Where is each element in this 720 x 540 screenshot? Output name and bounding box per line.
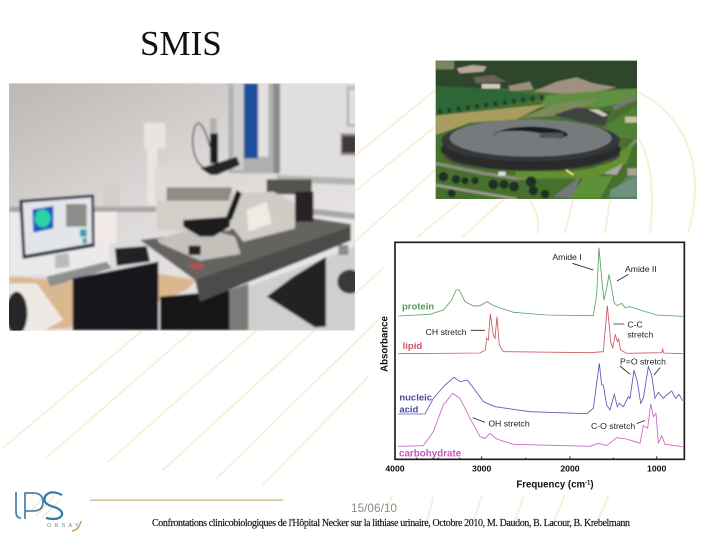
x axis labels: 2000 [560, 464, 580, 474]
nucleic acid spectrum: acid [399, 404, 419, 415]
photo: infrared microscope laboratory [6, 80, 363, 337]
lipid spectrum [398, 306, 683, 354]
x axis labels: 3000 [472, 464, 491, 474]
background: pale concentric yellow arcs [3, 90, 695, 523]
logo: LPS Orsay: ORSAY [47, 523, 82, 529]
x axis labels: Frequency (cm [516, 479, 585, 490]
peak annotations: stretch [627, 330, 653, 340]
table slab [140, 218, 351, 302]
nucleic acid spectrum [398, 363, 683, 415]
photo: SOLEIL synchrotron aerial view [433, 59, 640, 202]
footer date: 15/06/10 [351, 501, 397, 515]
footer citation: Confrontations clinicobiologiques de l'Hôpital Necker sur la lithiase urinaire, Octobre 2010, M. Daudon, B. Lacour, B. Krebelmann [152, 518, 630, 529]
peak annotations: C-C [627, 319, 643, 329]
x axis labels: -1 [585, 480, 591, 486]
spectra chart panel [380, 238, 690, 495]
floor and legs [248, 247, 355, 331]
x axis labels: ) [590, 479, 594, 490]
peak annotations: P=O stretch [620, 356, 666, 366]
title: SMIS [140, 24, 222, 63]
instruments on the table [193, 123, 210, 167]
protein spectrum [398, 248, 683, 316]
nucleic acid spectrum: nucleic [399, 392, 432, 403]
peak annotations [426, 252, 666, 431]
peak annotations: OH stretch [488, 419, 530, 429]
monitor [19, 194, 95, 259]
y axis label: Absorbance [380, 315, 391, 372]
x axis labels [385, 464, 666, 490]
footer rule [90, 500, 283, 501]
x axis labels: 1000 [647, 464, 666, 474]
chart frame [395, 242, 684, 459]
carbohydrate spectrum: carbohydrate [399, 448, 462, 459]
carbohydrate spectrum [398, 393, 683, 459]
logo: LPS Orsay [16, 492, 82, 531]
protein spectrum: protein [402, 301, 434, 312]
peak annotations: Amide II [625, 264, 657, 274]
peak annotations: C-O stretch [591, 421, 635, 431]
peak annotations: CH stretch [426, 327, 467, 337]
peak annotations: Amide I [552, 252, 582, 262]
x axis labels: 4000 [385, 464, 405, 474]
desk items [9, 283, 63, 331]
lipid spectrum: lipid [403, 341, 422, 352]
